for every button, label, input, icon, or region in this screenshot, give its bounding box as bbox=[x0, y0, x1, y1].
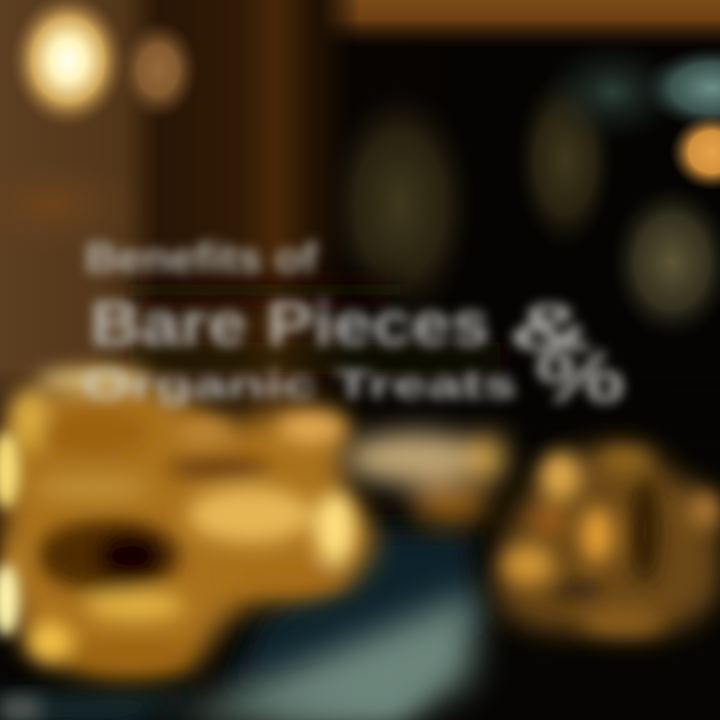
title line 2: Bare Pieces bbox=[90, 290, 490, 359]
left edge highlights bbox=[0, 432, 20, 636]
background: warm ceiling band bbox=[320, 0, 720, 48]
title line 1: Benefits of bbox=[85, 234, 318, 281]
title line 3: Organic Treats bbox=[82, 363, 517, 407]
icon: glowing lamp bbox=[10, 0, 198, 128]
title bbox=[82, 234, 625, 418]
gold treats pile right bbox=[495, 445, 720, 635]
dark shadow behind title bbox=[120, 280, 510, 366]
icon: orange background light bbox=[670, 114, 720, 190]
plate with treat centre bbox=[345, 432, 505, 523]
ampersand upper: & bbox=[508, 290, 593, 364]
background: brown wall at left bbox=[0, 0, 343, 435]
table band: teal surface bbox=[0, 530, 480, 720]
background: olive and teal blurred shelves bbox=[325, 40, 720, 340]
gold treats pile left bbox=[0, 371, 373, 675]
percent lower: % bbox=[535, 338, 625, 418]
